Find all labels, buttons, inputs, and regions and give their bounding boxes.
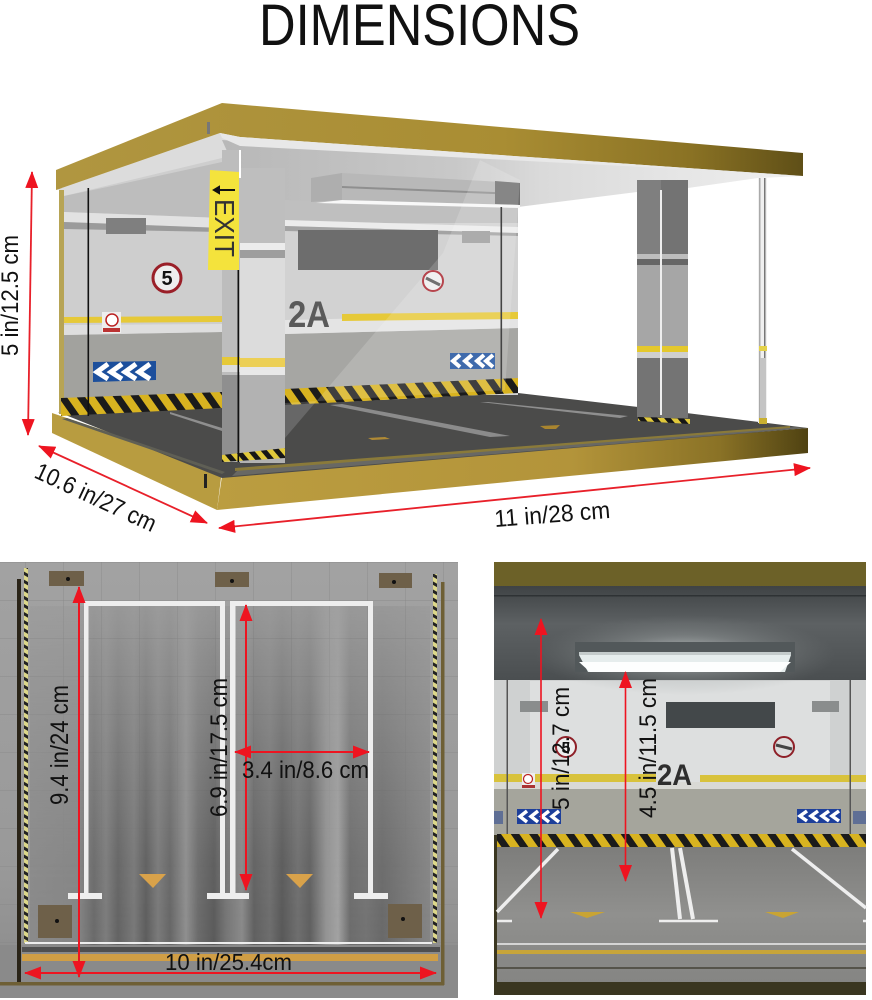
small vent right <box>462 231 490 243</box>
arrow: bay width <box>235 751 369 753</box>
no horn sign <box>774 737 794 757</box>
side hazard strips <box>24 568 437 943</box>
arrow: clearance height <box>624 672 626 881</box>
exit sign <box>208 170 240 270</box>
label: product width: 11 in/28 cm <box>493 497 611 533</box>
floor parking lines <box>170 402 628 440</box>
ceiling light fixture <box>311 173 520 208</box>
orange direction triangles <box>139 874 313 888</box>
roof slab <box>56 103 803 190</box>
ceiling <box>222 140 803 207</box>
arrow: product height <box>28 172 32 435</box>
floor markings <box>497 848 866 944</box>
white parking bay lines <box>68 601 388 899</box>
no smoking sign <box>102 312 121 333</box>
light glow <box>535 615 835 695</box>
bottom lane markings <box>497 950 866 969</box>
label: bay length: 6.9 in/17.5 cm <box>206 678 233 817</box>
glass edges <box>88 150 502 462</box>
base slab <box>52 393 808 510</box>
no smoking sign <box>522 773 535 788</box>
arrow: total width <box>25 972 436 974</box>
right pillar <box>637 180 690 424</box>
ceiling <box>494 586 866 681</box>
panel: product perspective view <box>52 103 808 510</box>
arrow: product depth <box>39 446 207 523</box>
speed sign 5: 5 <box>161 268 173 290</box>
speed sign 5: 5 <box>562 740 571 757</box>
mounting blocks <box>38 571 422 938</box>
right clear post <box>758 178 767 424</box>
left wall <box>56 133 240 416</box>
left corner pillar <box>222 150 285 463</box>
panel: front interior view <box>494 562 866 995</box>
vents <box>520 701 839 728</box>
label: total width: 10 in/25.4cm <box>165 949 292 975</box>
level label 2A: 2A <box>657 759 692 792</box>
block screw holes <box>55 577 405 923</box>
arrow: bay length <box>245 605 247 890</box>
no horn sign <box>423 271 443 291</box>
speed sign 5 <box>556 737 576 757</box>
panel: floor plan <box>0 562 458 998</box>
wall <box>494 680 866 835</box>
blue chevron signs <box>494 809 866 824</box>
floor <box>497 847 866 982</box>
arrow: total depth <box>78 587 80 977</box>
label: bay width: 3.4 in/8.6 cm <box>242 757 369 784</box>
glass reflection <box>285 160 520 438</box>
blue chevron sign right <box>450 353 495 369</box>
back wall <box>285 195 518 405</box>
arrow: total height <box>540 619 542 918</box>
large vent panel <box>298 230 438 270</box>
hazard stripe <box>497 834 866 847</box>
back wall hazard stripe <box>285 378 518 405</box>
label: total depth: 9.4 in/24 cm <box>46 685 74 805</box>
level label 2A: 2A <box>288 294 330 335</box>
left hazard stripe <box>61 392 222 416</box>
exit arrow <box>214 187 235 193</box>
speed sign 5 <box>153 264 181 292</box>
orange direction arrows <box>570 912 799 918</box>
outer frame edges <box>0 579 444 986</box>
blue chevron sign left <box>93 361 156 382</box>
arrow: product width <box>219 468 810 528</box>
bottom lane markings <box>22 942 440 961</box>
exit sign: EXIT <box>209 199 240 257</box>
label: product depth: 10.6 in/27 cm <box>30 458 161 538</box>
wall vent <box>106 218 146 234</box>
label: clearance height: 4.5 in/11.5 cm <box>635 678 662 818</box>
ceiling light <box>575 642 795 672</box>
left gold side strip <box>59 188 64 414</box>
label: total height: 5 in/12.7 cm <box>548 687 575 810</box>
